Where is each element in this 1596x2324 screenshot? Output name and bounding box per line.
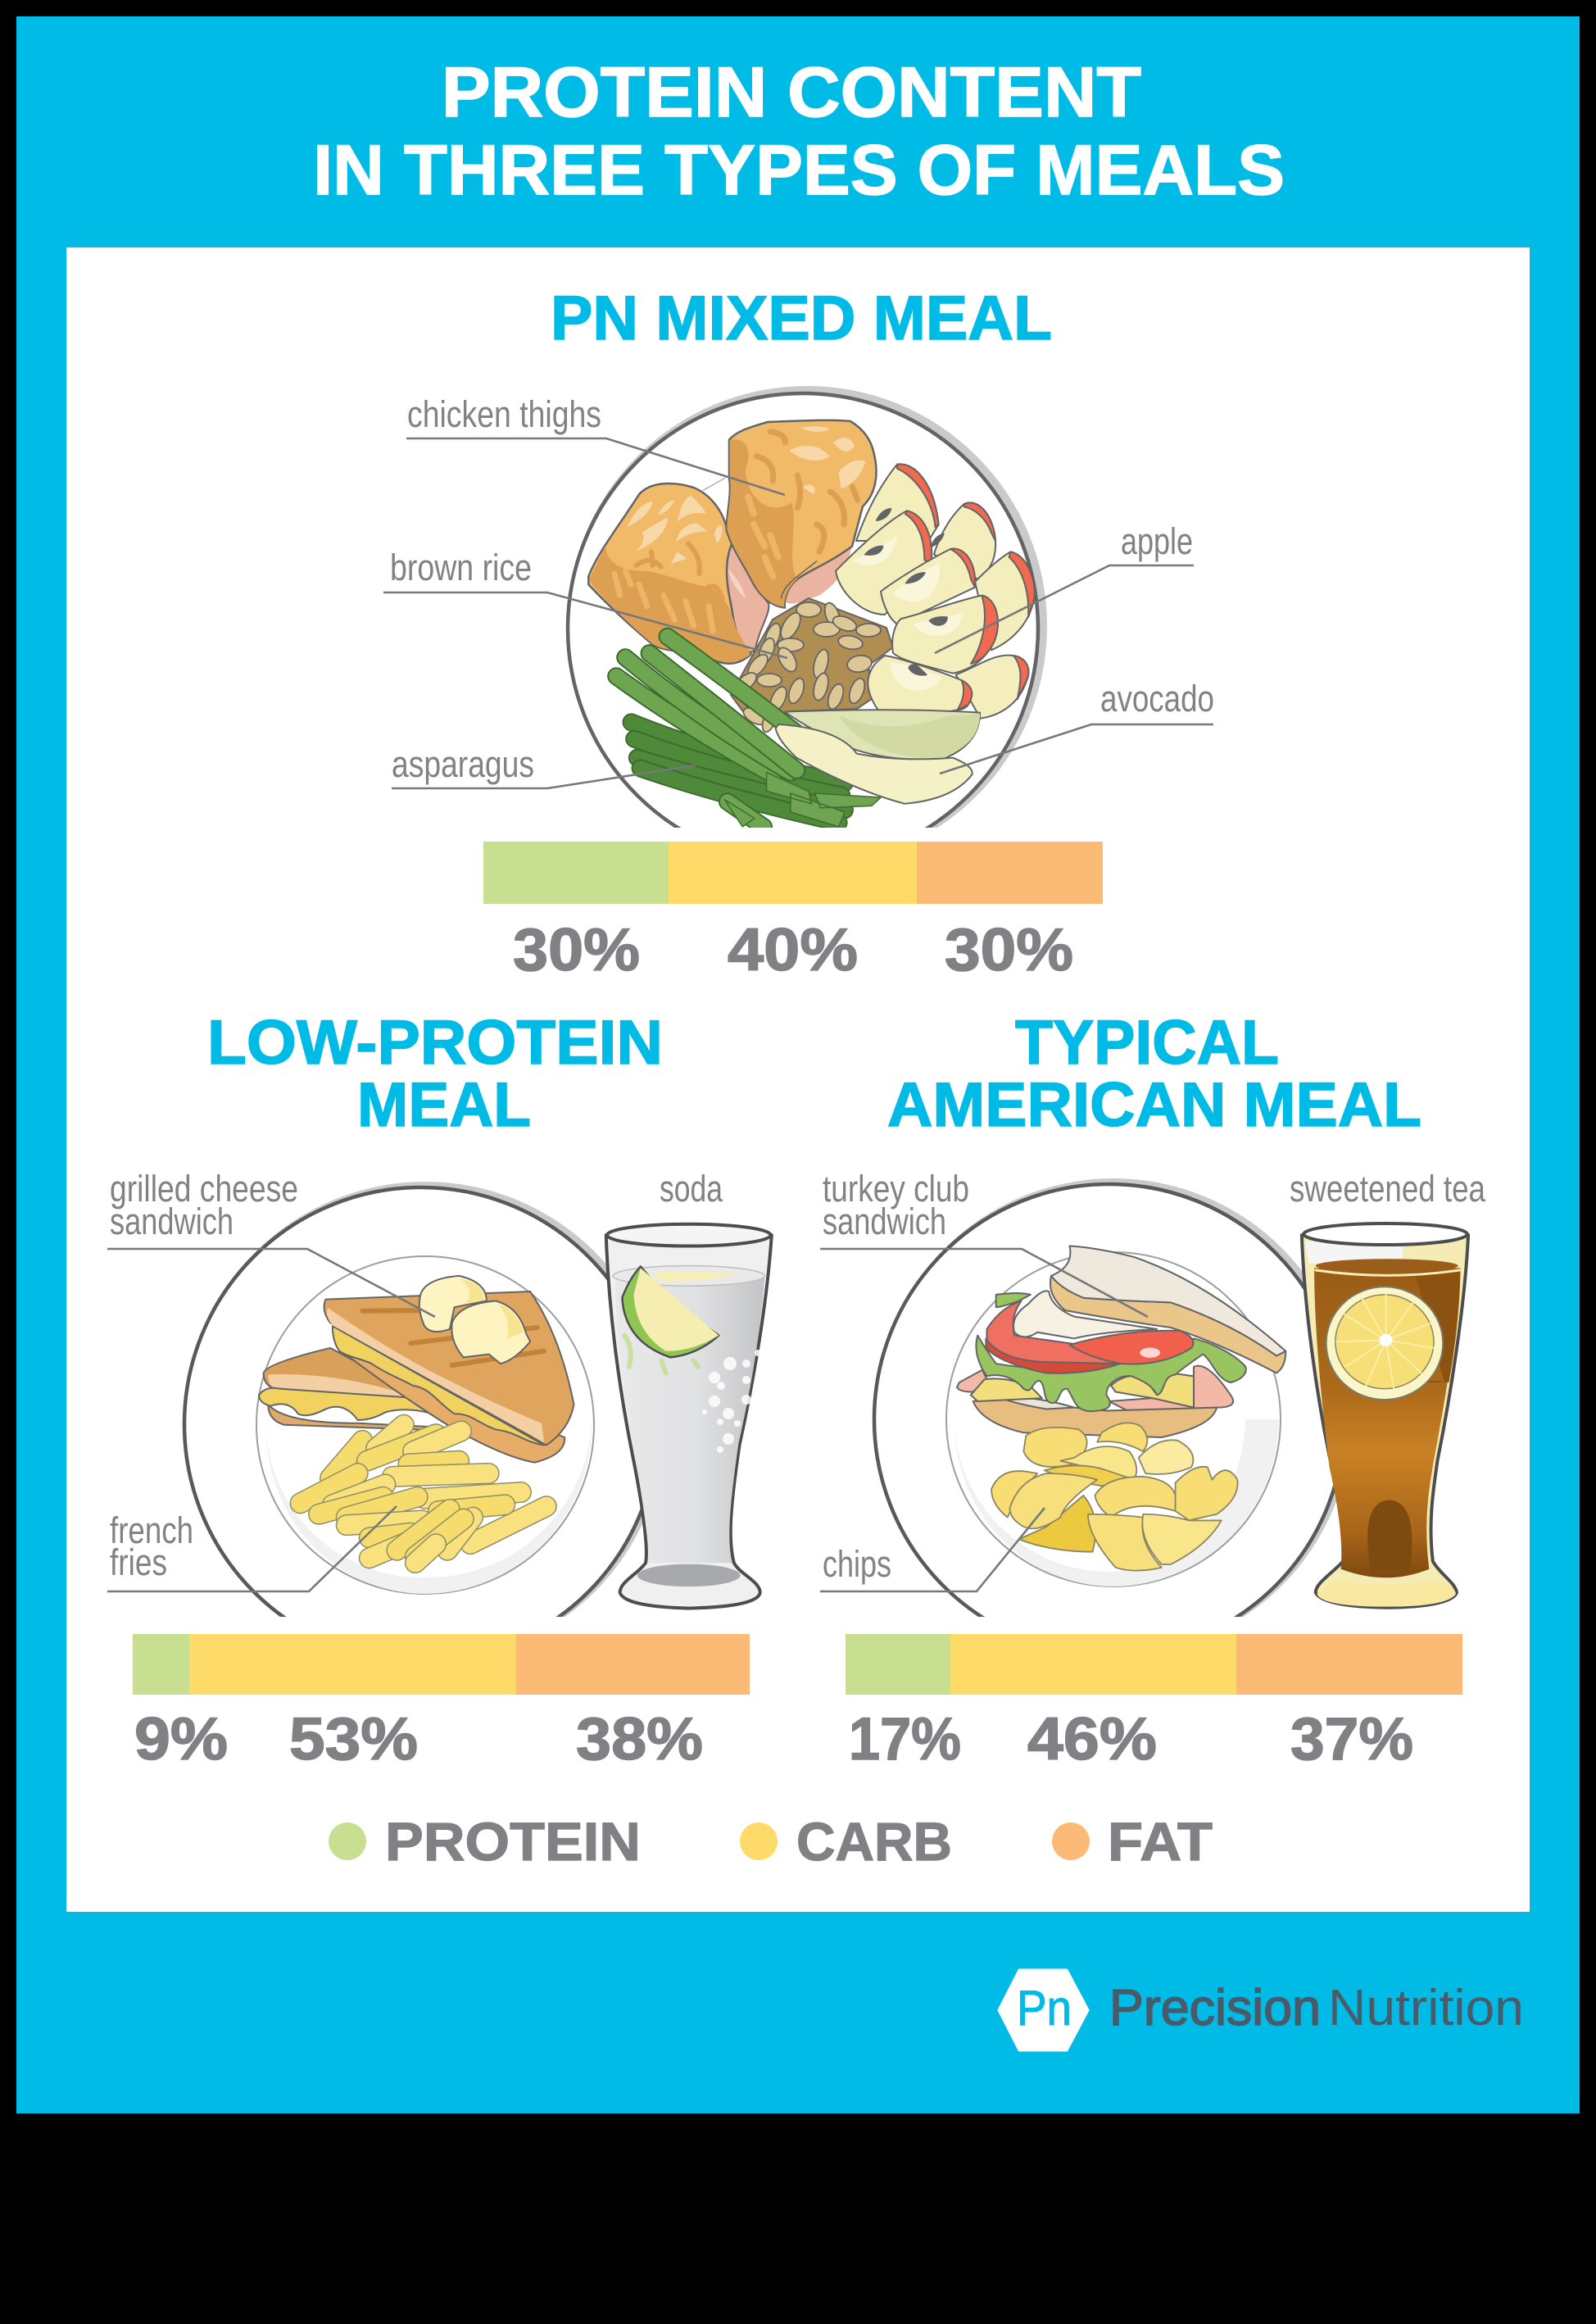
label: french fries: french xyxy=(110,1509,193,1551)
food: apple slices xyxy=(836,464,1035,721)
values: low-protein meal percentages: 38% xyxy=(576,1706,703,1773)
legend: fat xyxy=(1052,1811,1213,1872)
values: low-protein meal percentages: 9% xyxy=(134,1706,228,1773)
heading: typical American meal: TYPICAL xyxy=(1015,1008,1279,1078)
label: avocado xyxy=(940,678,1214,774)
wordmark: Nutrition xyxy=(1328,1980,1524,2036)
food: french fries xyxy=(301,1425,546,1563)
label: turkey club sandwich: sandwich xyxy=(823,1201,946,1242)
plate xyxy=(182,1182,642,1617)
illustration: sweetened tea glass xyxy=(1302,1223,1468,1608)
food: brown rice xyxy=(731,598,893,733)
food: turkey club sandwich xyxy=(957,1246,1285,1437)
label: sweetened tea: sweetened tea xyxy=(1290,1168,1486,1210)
values: typical American meal percentages: 37% xyxy=(1290,1706,1413,1773)
legend: carb: CARB xyxy=(796,1811,952,1872)
label: chicken thighs: chicken thighs xyxy=(407,393,601,435)
label: turkey club sandwich xyxy=(820,1168,1148,1317)
label: grilled cheese sandwich: sandwich xyxy=(110,1201,234,1242)
legend xyxy=(329,1811,1213,1872)
values: typical American meal percentages xyxy=(849,1706,1413,1773)
label: grilled cheese sandwich: grilled cheese xyxy=(110,1168,298,1210)
title: PROTEIN CONTENT xyxy=(442,53,1141,132)
label: asparagus xyxy=(392,743,696,788)
heading: typical American meal xyxy=(887,1008,1421,1140)
label: french fries: fries xyxy=(110,1541,167,1583)
food: asparagus xyxy=(616,637,881,827)
illustration: soda glass xyxy=(606,1224,772,1609)
bar chart: low-protein meal xyxy=(133,1634,750,1695)
panel: white content card xyxy=(66,247,1530,1912)
plate xyxy=(872,1178,1336,1617)
label: french fries xyxy=(107,1506,397,1591)
label: asparagus: asparagus xyxy=(392,743,534,785)
label: avocado: avocado xyxy=(1100,678,1214,719)
food: grilled cheese sandwich xyxy=(259,1276,574,1463)
title: IN THREE TYPES OF MEALS xyxy=(313,131,1285,210)
food: chicken thighs xyxy=(588,420,877,664)
label: chips: chips xyxy=(823,1543,891,1585)
values: typical American meal percentages: 46% xyxy=(1027,1706,1157,1773)
illustration: typical American meal plate xyxy=(872,1178,1336,1617)
values: typical American meal percentages: 17% xyxy=(849,1706,961,1773)
heading: PN mixed meal: PN MIXED MEAL xyxy=(551,284,1052,353)
values: PN mixed meal percentages xyxy=(513,917,1073,983)
heading: typical American meal: AMERICAN MEAL xyxy=(887,1070,1421,1140)
food: avocado xyxy=(776,710,980,804)
label: brown rice: brown rice xyxy=(390,547,532,588)
legend: fat: FAT xyxy=(1108,1811,1213,1872)
food: chips xyxy=(991,1423,1238,1571)
wordmark xyxy=(1109,1980,1524,2036)
label: soda: soda xyxy=(660,1168,723,1210)
values: PN mixed meal percentages: 40% xyxy=(728,917,858,983)
legend: protein: PROTEIN xyxy=(385,1811,641,1872)
heading: low-protein meal xyxy=(207,1008,663,1140)
icon: Pn hexagon: Pn xyxy=(1017,1981,1072,2036)
label: grilled cheese sandwich xyxy=(107,1168,435,1317)
heading: low-protein meal: LOW-PROTEIN xyxy=(207,1008,663,1078)
label: chips xyxy=(820,1508,1045,1591)
logo: Precision Nutrition xyxy=(999,1970,1524,2050)
values: low-protein meal percentages xyxy=(134,1706,703,1773)
illustration: PN mixed meal plate xyxy=(567,386,1047,866)
heading: low-protein meal: MEAL xyxy=(357,1070,531,1140)
lemon slice xyxy=(1326,1287,1443,1400)
wordmark: Precision xyxy=(1109,1980,1321,2036)
icon: Pn hexagon xyxy=(999,1970,1088,2050)
illustration: low-protein meal plate xyxy=(182,1182,642,1617)
bar chart: typical American meal xyxy=(846,1634,1462,1695)
label: apple xyxy=(935,520,1194,653)
label: apple: apple xyxy=(1121,520,1193,562)
values: low-protein meal percentages: 53% xyxy=(289,1706,418,1773)
title xyxy=(313,53,1285,210)
label: chicken thighs xyxy=(406,393,785,495)
label: turkey club sandwich: turkey club xyxy=(823,1168,969,1210)
label: brown rice xyxy=(383,547,787,658)
plate xyxy=(567,386,1047,866)
bubbles xyxy=(702,1350,761,1453)
values: PN mixed meal percentages: 30% xyxy=(513,917,640,983)
values: PN mixed meal percentages: 30% xyxy=(945,917,1073,983)
bar chart: PN mixed meal xyxy=(483,842,1103,904)
